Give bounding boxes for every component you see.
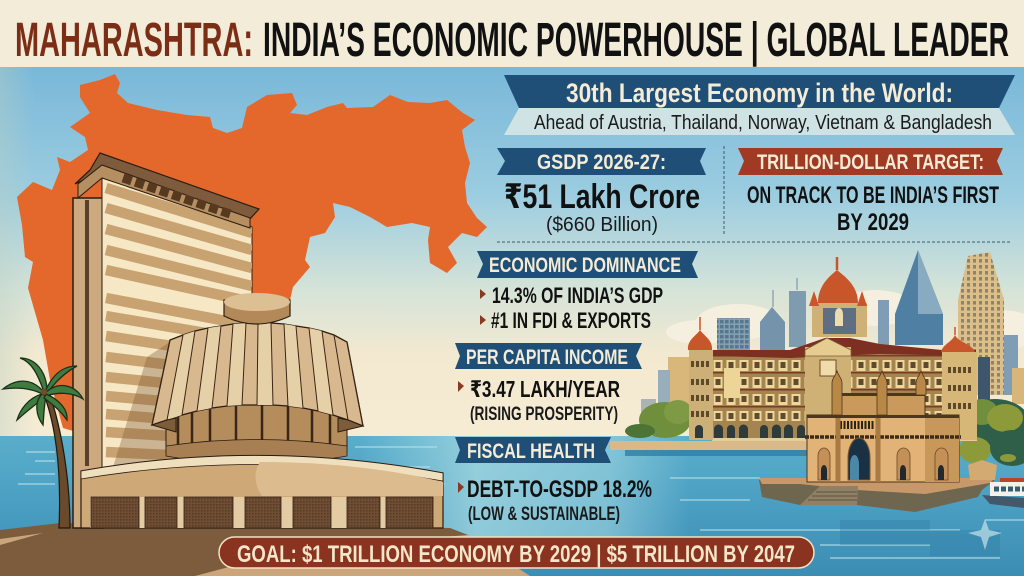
pleated dome [152,323,363,432]
title band [0,0,1024,67]
right turret [941,327,977,440]
bullet marker [480,289,486,299]
bullet marker [480,315,486,325]
gateway body [807,415,959,482]
dominance ribbon [477,251,698,278]
fiscal ribbon [455,437,611,463]
income value: ₹3.47 LAKH/YEAR [470,376,620,402]
map of Maharashtra [17,74,487,435]
banner heading: 30th Largest Economy in the World: [566,78,953,108]
fiscal note: (LOW & SUSTAINABLE) [468,504,620,525]
drum [166,405,347,464]
trees by the waterfront [625,399,1024,466]
hotel arches [695,424,805,438]
title: Maharashtra: MAHARASHTRA: [15,14,253,67]
GSDP label: GSDP 2026-27: [537,151,666,174]
dominance item one: 14.3% OF INDIA’S GDP [492,283,663,308]
panel: trillion-dollar target [738,148,1003,236]
goal text: GOAL: $1 TRILLION ECONOMY BY 2029 | $5 TRILLION BY 2047 [237,541,795,568]
side arches [818,448,948,480]
water [0,436,1024,576]
income note: (RISING PROSPERITY) [470,404,618,425]
Vidhan Bhavan assembly building [81,293,443,528]
GSDP value: ₹51 Lakh Crore [504,178,700,216]
dome cap [224,293,290,324]
roof [75,153,259,220]
goal pill [219,537,814,568]
palm tree [3,358,83,528]
GSDP ribbon [497,148,706,175]
ground [0,523,530,576]
background sky [0,67,1024,437]
target ribbon [738,148,1003,175]
income ribbon [455,343,642,369]
left edge tint [0,67,35,537]
small pavilion [968,460,997,480]
bullet marker [458,381,464,392]
panel: GSDP [497,148,706,236]
tower stripes [106,188,252,459]
panel: per capita income [455,343,642,425]
Gateway of India [759,371,997,512]
base [81,455,443,528]
GSDP in dollars: ($660 Billion) [546,214,658,236]
ferry boat [982,478,1024,508]
panel: economic dominance [477,251,698,333]
gateway turrets [832,371,926,415]
central arch [848,438,870,480]
dominance item two: #1 IN FDI & EXPORTS [491,308,651,333]
banner: ahead of [504,108,1015,135]
fiscal value: DEBT-TO-GSDP 18.2% [467,476,652,503]
left turret [688,317,713,440]
target line two: BY 2029 [837,209,909,236]
central tower and dome [809,257,867,337]
income label: PER CAPITA INCOME [466,346,628,369]
bullet marker [458,482,464,493]
platform [759,480,995,512]
skyline and clouds [641,250,1024,419]
Mantralaya tower [73,153,259,528]
panel: fiscal health [455,437,652,525]
sparkle [968,519,1002,550]
Taj Mahal Palace hotel [688,257,977,441]
banner: world ranking [504,75,1015,108]
dominance label: ECONOMIC DOMINANCE [489,254,681,277]
fiscal label: FISCAL HEALTH [467,440,595,463]
